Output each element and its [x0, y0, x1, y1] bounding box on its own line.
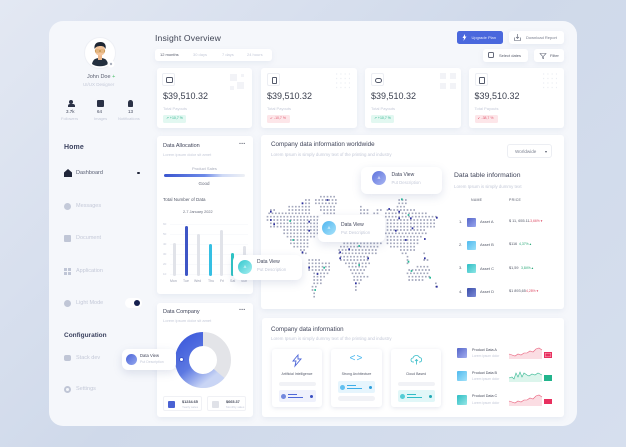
stat: images: Images	[94, 116, 107, 121]
popup: data view middle: Put Description	[341, 230, 370, 235]
popup: data view chart	[233, 255, 302, 280]
product row c: Lorem ipsum dolor	[472, 400, 499, 404]
popup: data view donut	[122, 349, 176, 370]
menu dots: ···	[239, 307, 245, 314]
button: select dates	[483, 49, 528, 62]
stat card 1: $39,510.32	[163, 91, 208, 101]
donut marker	[179, 357, 184, 362]
popup: data view middle	[318, 215, 385, 242]
date range tabs: 30 days	[193, 52, 207, 57]
stat: followers: 3.7k	[66, 109, 75, 114]
stat card 3	[365, 68, 461, 128]
nav item: settings	[64, 386, 96, 393]
product row a: Lorem ipsum dolor	[472, 354, 499, 358]
button: filter	[534, 49, 564, 62]
table row: asset b: 2.	[459, 242, 462, 246]
total box 2: $665.37	[226, 400, 240, 404]
progress bar	[164, 174, 245, 176]
table row: asset c	[459, 264, 534, 273]
table row: asset b: Asset B	[480, 242, 494, 247]
main dashboard panel	[49, 21, 577, 426]
nav heading: home: Home	[64, 144, 84, 151]
product row c: Product Data C	[472, 394, 497, 398]
nav item: dashboard: Dashboard	[76, 170, 103, 176]
product row a	[457, 348, 552, 359]
stat: images: 64	[97, 109, 102, 114]
table row: asset a: $ 11, 655.11	[509, 219, 530, 223]
total box 2: Monthly sales	[226, 405, 244, 409]
stat card 2: $39,510.32	[267, 91, 312, 101]
heading: Company data information worldwide	[271, 141, 375, 148]
table row: asset d: 4.	[459, 288, 462, 294]
feature card: artificial intelligence	[272, 349, 322, 407]
nav item: application: Application	[76, 268, 103, 274]
popup: data view middle: Data View	[341, 222, 364, 228]
table heading: Data table information	[454, 172, 520, 178]
dotted world map	[266, 196, 438, 298]
feature card: strong architecture	[331, 349, 382, 407]
popup: data view middle: A	[328, 224, 330, 230]
stat card 2: Total Payouts	[267, 106, 291, 110]
button: download report: Download Report	[526, 34, 557, 40]
date range tabs	[155, 49, 272, 61]
table row: asset a: Asset A	[480, 219, 494, 224]
table row: asset b: $116	[509, 242, 517, 246]
table row: asset a	[459, 218, 542, 227]
bar chart: 60	[163, 222, 166, 226]
popup: data view chart: A	[244, 264, 246, 268]
popup: data view chart: Put Description	[257, 267, 286, 272]
product row b: Lorem ipsum dolor	[472, 377, 499, 381]
stat card 1: Total Payouts	[163, 106, 187, 110]
feature card: cloud based	[391, 349, 441, 407]
progress label: Product Sales	[192, 166, 217, 171]
date range tabs: 7 days	[222, 52, 234, 57]
title: Insight Overview	[155, 32, 221, 42]
table row: asset c: Asset C	[480, 266, 494, 270]
profile name: John Doe +	[87, 74, 115, 80]
product row b	[457, 370, 552, 382]
total box 1: $1234.65	[182, 400, 198, 404]
toggle	[125, 298, 142, 308]
bar chart	[163, 222, 247, 283]
button: select dates: Select dates	[499, 52, 521, 58]
popup: data view donut: Data View	[140, 353, 159, 358]
bar chart: Sun	[241, 279, 247, 283]
stat: followers: Followers	[61, 116, 78, 121]
table row: asset c: 3,84% ▴	[521, 266, 533, 270]
table header: PRICE	[509, 198, 521, 202]
table row: asset a: 1.	[459, 218, 462, 224]
bar chart: 30	[163, 252, 166, 256]
stat card 4: $39,510.32	[474, 91, 520, 101]
stat: images	[94, 100, 107, 121]
sidebar	[61, 38, 142, 393]
button: upgrade plan	[457, 31, 503, 44]
bar chart: Fri	[220, 279, 224, 283]
stat card 2	[261, 68, 357, 128]
button: upgrade plan: Upgrade Plan	[472, 34, 496, 40]
button: filter: Filter	[550, 52, 559, 58]
date selector: 2-7 January 2022	[183, 210, 213, 214]
table subtitle: Lorem Ipsum is simply dummy text	[454, 184, 522, 188]
table row: asset c: $1,59	[509, 266, 519, 270]
panel: data allocation	[157, 136, 253, 294]
table row: asset c: 3.	[459, 265, 462, 270]
stat card 1	[157, 68, 252, 128]
bar chart: Wed	[194, 279, 201, 283]
popup: data view top: A	[378, 174, 380, 180]
date range tabs: 12 months	[160, 52, 179, 57]
nav item: light mode: Light Mode	[76, 300, 103, 306]
popup: data view top: Data View	[392, 172, 414, 178]
panel: company data information	[262, 318, 564, 417]
total box 1	[163, 396, 202, 411]
stat card 4	[468, 68, 564, 128]
stat card 2: ↙ -10,7 %	[270, 116, 286, 120]
feature card: cloud based: Cloud Based	[406, 372, 426, 376]
popup: data view chart: Data View	[257, 259, 280, 265]
subtitle: Lorem Ipsum is simply dummy text of the printing and industry	[271, 336, 392, 341]
table row: asset a: -3,66% ▾	[529, 219, 542, 223]
bar chart: 40	[163, 242, 166, 246]
nav heading: configuration: Configuration	[64, 332, 107, 339]
nav item: document	[64, 234, 101, 242]
nav item: messages	[64, 202, 101, 210]
feature card: artificial intelligence: Artificial Intelligence	[282, 372, 312, 376]
heading: Data Allocation	[163, 142, 200, 148]
progress status: Good	[198, 181, 210, 186]
table row: asset d: Asset D	[480, 289, 494, 294]
subtitle: Lorem Ipsum is simply dummy text of the printing and industry	[271, 152, 392, 156]
total box 1: Yearly sales	[182, 405, 198, 409]
bar chart: 20	[163, 262, 166, 266]
stat card 3: ↗ +10,7 %	[374, 116, 391, 120]
table row: asset d: 4,28% ▾	[526, 289, 538, 293]
button: download report	[509, 31, 564, 44]
date range tabs: 24 hours	[247, 52, 263, 57]
stat: notifications	[118, 100, 140, 121]
panel: data company	[157, 303, 253, 417]
table row: asset b	[459, 241, 532, 250]
panel: world map	[261, 135, 564, 309]
stat card 1: ↗ +10,7 %	[166, 116, 183, 120]
stat card 4: Total Payouts	[474, 106, 499, 110]
table row: asset d: $1 893,65	[509, 289, 526, 293]
heading: Data Company	[163, 308, 200, 314]
dropdown: worldwide	[507, 144, 552, 158]
subtitle: Lorem ipsum dolor sit amet	[163, 318, 211, 322]
table row: asset b: 4,37% ▴	[519, 242, 531, 246]
subtitle: Lorem ipsum dolor sit amet	[163, 152, 211, 156]
nav item: document: Document	[76, 234, 101, 240]
avatar	[85, 38, 115, 68]
product row a: Product Data A	[472, 348, 497, 352]
nav item: stack dev: Stack dev	[76, 354, 100, 360]
bar chart: Tue	[183, 279, 189, 283]
donut chart	[176, 332, 231, 388]
stat: notifications: Notifications	[118, 116, 140, 121]
stat card 3: $39,510.32	[371, 91, 416, 101]
popup: data view donut: Put Description	[140, 360, 164, 364]
feature card: strong architecture: Strong Architecture	[342, 372, 371, 376]
stat: notifications: 13	[128, 109, 133, 114]
profile role: UI/UX Designer	[83, 82, 114, 87]
product row b: Product Data B	[472, 370, 497, 374]
dropdown: worldwide: Worldwide	[515, 148, 536, 154]
stat card 4: ↙ -38,7 %	[478, 116, 493, 120]
popup: data view top: Put Description	[392, 180, 421, 185]
feature card: strong architecture: <>	[350, 353, 363, 364]
nav item: light mode	[64, 298, 142, 308]
nav item: dashboard	[64, 169, 140, 177]
bar chart: Sat	[230, 279, 235, 283]
nav item: application	[64, 268, 103, 275]
bar chart: 50	[163, 232, 166, 236]
bar chart: 10	[163, 272, 166, 276]
product row c	[457, 394, 552, 406]
nav item: stack dev	[64, 354, 100, 361]
nav item: messages: Messages	[76, 202, 101, 208]
table header: NAME	[471, 198, 482, 202]
table row: asset d	[459, 288, 538, 297]
chart heading: Total Number of Data	[163, 197, 206, 202]
stat card 3: Total Payouts	[371, 106, 395, 110]
total box 2	[207, 396, 246, 411]
bar chart: Thu	[208, 279, 214, 283]
table header	[471, 198, 521, 202]
heading: Company data information	[271, 326, 344, 332]
nav item: settings: Settings	[76, 386, 96, 392]
menu dots: ···	[239, 141, 245, 148]
bar chart: Mon	[170, 279, 177, 283]
stat: followers	[61, 100, 78, 121]
popup: data view top	[361, 167, 442, 194]
